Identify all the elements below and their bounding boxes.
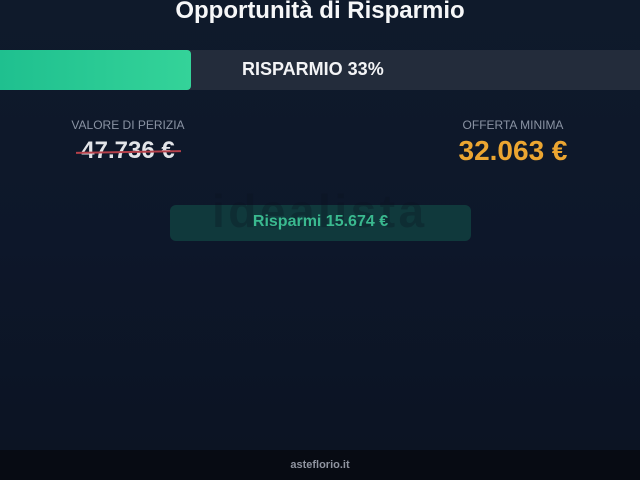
value: 32.063 € — [458, 135, 568, 166]
savings text: Risparmi 15.674 € — [253, 213, 388, 230]
strikethrough — [76, 150, 181, 154]
progress fill — [0, 50, 191, 90]
panel: valore di perizia — [71, 118, 185, 164]
progress bar — [0, 50, 640, 90]
footer — [0, 450, 640, 480]
progress label: RISPARMIO 33% — [242, 59, 384, 79]
savings badge — [170, 205, 471, 241]
watermark: idealista — [212, 185, 428, 237]
label: OFFERTA MINIMA — [463, 118, 563, 132]
label: VALORE DI PERIZIA — [71, 118, 185, 132]
footer text: asteflorio.it — [290, 459, 350, 471]
value struck through: 47.736 € — [81, 137, 175, 164]
panel: offerta minima — [458, 118, 568, 166]
